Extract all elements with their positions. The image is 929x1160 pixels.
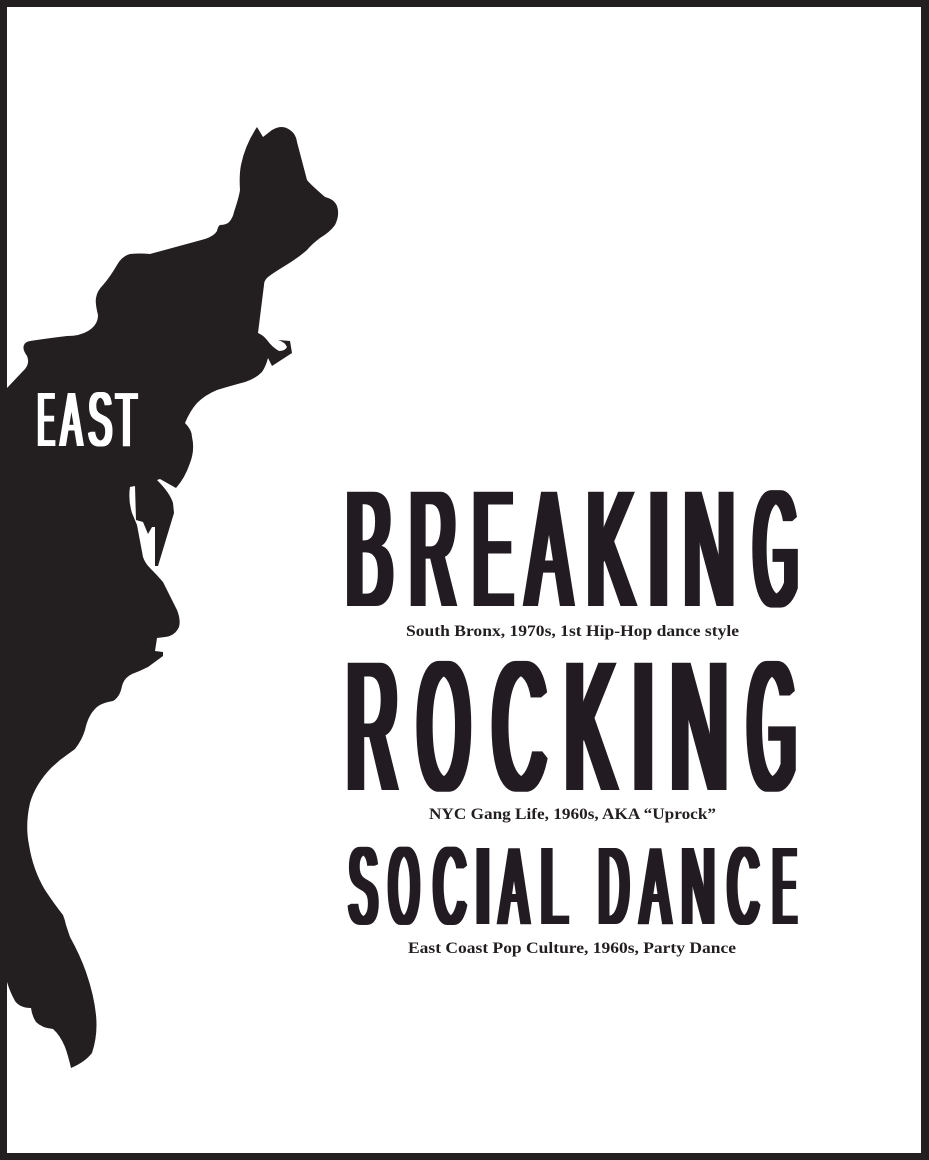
heading: SOCIAL DANCE: S xyxy=(349,825,377,948)
heading: SOCIAL DANCE: O xyxy=(389,825,419,948)
heading: ROCKING xyxy=(347,624,795,830)
text: G xyxy=(748,624,795,830)
map label: EAST: E xyxy=(38,377,54,463)
caption: social dance: East Coast Pop Culture, 1960s, Party Dance xyxy=(408,940,736,957)
heading: ROCKING: N xyxy=(670,624,728,830)
heading: SOCIAL DANCE: I xyxy=(474,825,492,948)
heading: SOCIAL DANCE: A xyxy=(500,825,528,948)
heading: SOCIAL DANCE: C xyxy=(728,825,759,948)
heading: ROCKING: R xyxy=(347,624,397,830)
heading: BREAKING xyxy=(346,457,798,642)
text: G xyxy=(754,457,798,642)
heading: ROCKING: O xyxy=(418,624,469,830)
heading: BREAKING: R xyxy=(410,457,456,642)
heading: ROCKING: I xyxy=(632,624,655,830)
heading: BREAKING: K xyxy=(587,457,634,642)
heading: SOCIAL DANCE: A xyxy=(641,825,670,948)
heading: SOCIAL DANCE xyxy=(349,825,796,948)
map label: EAST: S xyxy=(88,377,112,463)
heading: SOCIAL DANCE: N xyxy=(682,825,715,948)
heading: BREAKING: I xyxy=(647,457,670,642)
caption: breaking: South Bronx, 1970s, 1st Hip-Hop dance style xyxy=(406,623,739,640)
heading: SOCIAL DANCE: D xyxy=(599,825,629,948)
text: E xyxy=(773,825,796,948)
heading: ROCKING: C xyxy=(493,624,545,830)
map label: EAST xyxy=(38,377,137,463)
heading: SOCIAL DANCE: C xyxy=(434,825,466,948)
map label: EAST: A xyxy=(61,377,82,463)
heading: SOCIAL DANCE: L xyxy=(541,825,566,948)
heading: BREAKING: N xyxy=(684,457,735,642)
heading: BREAKING: E xyxy=(473,457,512,642)
heading: BREAKING: B xyxy=(346,457,393,642)
heading: BREAKING: A xyxy=(527,457,571,642)
heading: ROCKING: K xyxy=(565,624,616,830)
text: T xyxy=(116,377,137,463)
caption: rocking: NYC Gang Life, 1960s, AKA “Uprock” xyxy=(429,806,716,823)
map: US east coast silhouette xyxy=(0,127,338,1068)
